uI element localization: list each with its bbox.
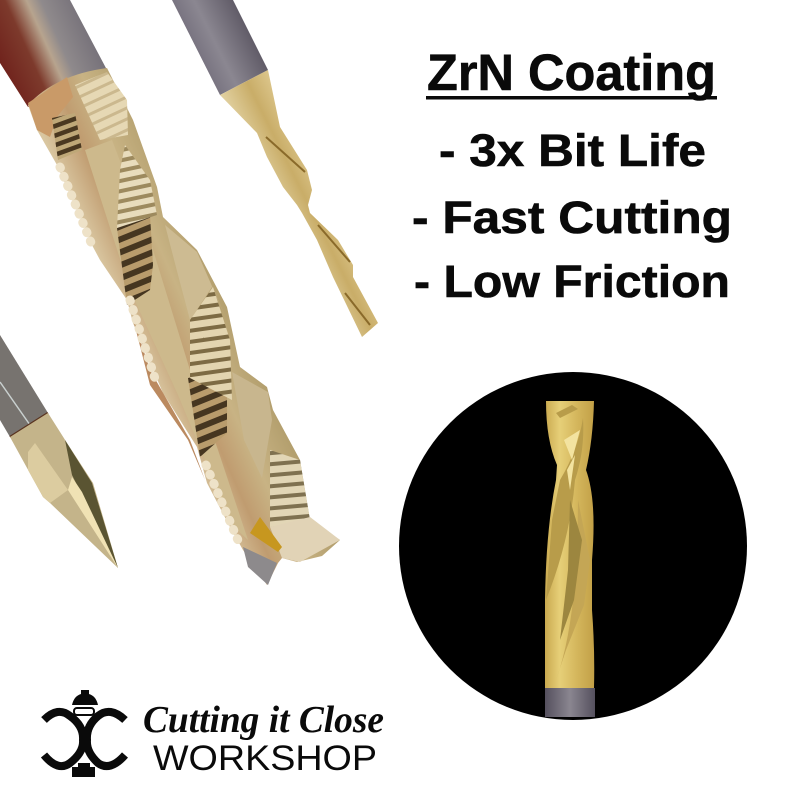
heading underline — [426, 96, 717, 100]
base — [72, 763, 95, 777]
light serrated bands — [75, 72, 128, 140]
end mill gold body — [545, 401, 594, 688]
black circle panel with end mill — [399, 372, 747, 720]
V-bit shank — [0, 335, 48, 437]
feature: low friction: - Low Friction — [414, 256, 730, 307]
small upper bit — [172, 0, 378, 337]
feature: fast cutting: - Fast Cutting — [412, 192, 732, 243]
feature: 3x bit life: - 3x Bit Life — [439, 125, 706, 176]
script wordmark: Cutting it Close — [143, 699, 384, 741]
small bit shank — [172, 0, 268, 95]
logo — [44, 690, 384, 778]
hard hat — [72, 690, 98, 705]
edge scallops — [60, 167, 240, 545]
copper collar — [28, 77, 73, 137]
logo mark: CC with helmet — [44, 690, 125, 777]
lower left V-bit — [0, 335, 118, 568]
cut tip: gold face — [250, 517, 282, 552]
large roughing bit — [0, 0, 340, 585]
cut tip: pale end — [270, 517, 340, 562]
V-bit gold tip — [10, 413, 118, 568]
feature list — [412, 125, 732, 307]
black circle — [399, 372, 747, 720]
end mill flutes — [546, 405, 583, 600]
workshop wordmark: WORKSHOP — [153, 739, 377, 778]
spiral flute lines — [266, 137, 370, 325]
heading: ZrN Coating: ZrN Coating — [427, 44, 716, 101]
gold highlight ridges — [85, 140, 248, 540]
large bit fluted body — [28, 68, 340, 585]
cut tip: gray face — [243, 547, 277, 585]
left and right arcs — [44, 712, 125, 766]
dark groove bands — [52, 113, 82, 160]
small bit gold tip — [220, 70, 378, 337]
large bit shank — [0, 0, 107, 107]
end mill shank — [545, 688, 595, 717]
goggles — [74, 708, 94, 715]
V-bit band — [10, 413, 48, 437]
